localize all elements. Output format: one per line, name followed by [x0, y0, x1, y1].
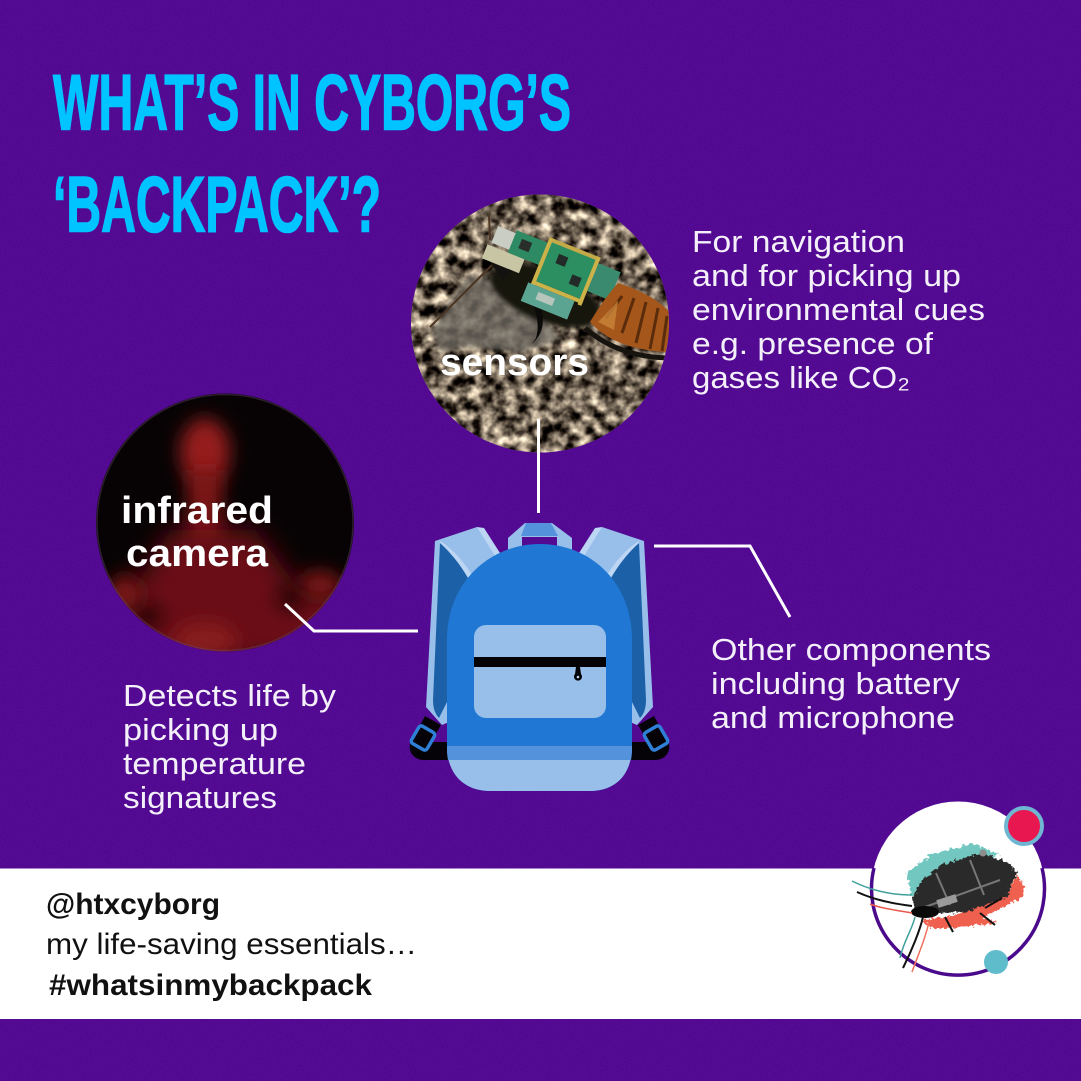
text: caption: #whatsinmybackpack — [49, 969, 372, 1002]
text: sensors description: environmental cues — [692, 292, 985, 327]
icon: cyborg cockroach badge — [852, 802, 1044, 975]
text: sensors description: gases like CO₂ — [692, 360, 910, 395]
bottom black straps — [410, 716, 450, 760]
left strap — [426, 527, 499, 725]
text: caption — [46, 888, 417, 1002]
connector: backpack to other components — [654, 546, 790, 617]
title: WHAT’S IN CYBORG’S — [53, 58, 571, 146]
top handle — [508, 523, 572, 552]
base panel — [447, 746, 632, 791]
text: other components description: Other components — [711, 632, 991, 667]
text: sensors description — [692, 224, 985, 395]
icon: backpack — [410, 523, 669, 791]
panel: sensors photo circle — [405, 190, 675, 460]
thermal human silhouette — [107, 418, 350, 670]
text: infrared description: temperature — [123, 746, 306, 781]
text: infrared description: Detects life by — [123, 678, 337, 713]
zipper — [474, 657, 606, 667]
label: infrared camera — [121, 490, 273, 575]
text: caption: @htxcyborg — [46, 888, 220, 921]
main body — [447, 544, 632, 791]
label: infrared camera: camera — [126, 533, 269, 575]
label: infrared camera: infrared — [121, 490, 273, 532]
title: ‘BACKPACK’? — [53, 160, 381, 248]
teal dot — [984, 950, 1008, 974]
photo: cyborg cockroach on rocky ground — [405, 190, 675, 460]
title — [53, 58, 571, 248]
text: infrared description — [123, 678, 337, 815]
text: other components description — [711, 632, 991, 735]
text: caption: my life-saving essentials… — [46, 928, 417, 961]
text: infrared description: signatures — [123, 780, 277, 815]
antennae and legs — [852, 881, 912, 895]
text: other components description: including battery — [711, 666, 961, 701]
roach illustration — [852, 843, 1025, 972]
text: other components description: and microphone — [711, 700, 955, 735]
text: sensors description: e.g. presence of — [692, 326, 933, 361]
connector: sensors to backpack — [537, 419, 540, 513]
abdomen — [590, 283, 672, 352]
front pocket — [474, 625, 606, 718]
right strap — [580, 527, 653, 725]
label: sensors: sensors — [440, 342, 589, 384]
text: infrared description: picking up — [123, 712, 278, 747]
circuit boards — [482, 226, 621, 320]
text: sensors description: For navigation — [692, 224, 905, 259]
text: sensors description: and for picking up — [692, 258, 961, 293]
bottom white band — [0, 868, 1081, 1019]
panel: infrared camera image circle — [96, 394, 354, 670]
connector: infrared camera to backpack — [285, 604, 418, 631]
red dot — [1006, 808, 1042, 844]
